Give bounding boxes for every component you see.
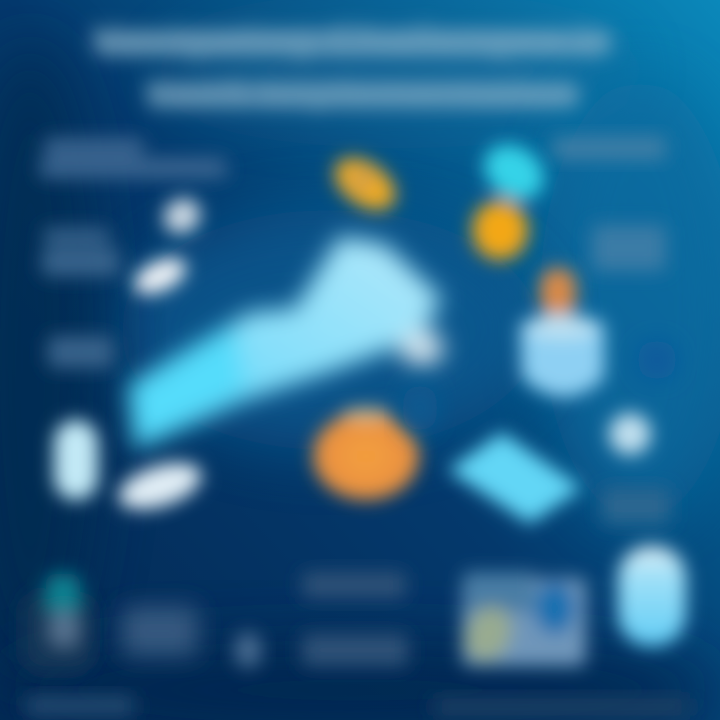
- text block: left middle: Data: [42, 228, 70, 243]
- text block: upper right: [550, 136, 666, 160]
- text block: left middle: Migration: [40, 252, 93, 267]
- text block: right middle: [590, 225, 666, 271]
- icon: white slab lower left: [113, 454, 207, 518]
- icon: cylinder lower right: [618, 546, 686, 646]
- text block: lower center top: [302, 572, 406, 598]
- illustration: central wing shape: [128, 236, 444, 450]
- text block: lower center top: Timeline: [302, 577, 355, 593]
- icon: small dark blue dot right: [637, 340, 677, 380]
- text block: left middle: [40, 228, 120, 276]
- text block: left lower: Security: [46, 344, 93, 359]
- icon: left capsule: [54, 420, 98, 500]
- icon: teal and grey tower lower left: [22, 574, 94, 672]
- icon: white gear pieces upper left: [128, 191, 207, 301]
- footer: right: [432, 698, 690, 716]
- icon: yellow coin top: [325, 147, 405, 221]
- icon: small blue accent above orange sphere: [402, 384, 438, 432]
- icon: pale dot right: [609, 413, 651, 455]
- text block: upper left: Key challenges: [42, 139, 137, 155]
- text block: right middle: Adoption: [590, 238, 641, 253]
- text block: upper right: Cost control: [550, 140, 625, 156]
- icon: small dot lower left: [234, 632, 262, 668]
- icon: cyan tile lower right: [448, 432, 582, 524]
- text block: right lower: Support: [600, 498, 646, 513]
- footer: right: Planning for long-term success: [432, 699, 611, 714]
- title: [90, 17, 614, 115]
- title: SaaS Implementation: [142, 73, 582, 115]
- text block: lower center bottom: Resources: [302, 641, 369, 657]
- text block: lower left: [122, 606, 198, 656]
- icon: cyan blob and orange coin top right: [472, 133, 555, 260]
- text block: left lower: [46, 336, 114, 368]
- text block: right lower: [600, 488, 670, 524]
- text block: lower left: Training: [122, 620, 168, 635]
- footer: left: [24, 696, 134, 716]
- icon: blue cup with orange top: [520, 268, 604, 397]
- footer: left: Overview: [24, 698, 79, 713]
- icon: orange sphere center: [313, 408, 419, 500]
- chart: dashboard panel: [456, 572, 586, 669]
- text block: upper left: Planning and integration needs: [38, 161, 231, 177]
- text block: upper left: [38, 138, 231, 178]
- title: Navigating Challenges in: [90, 17, 614, 61]
- text block: lower center bottom: [302, 634, 408, 666]
